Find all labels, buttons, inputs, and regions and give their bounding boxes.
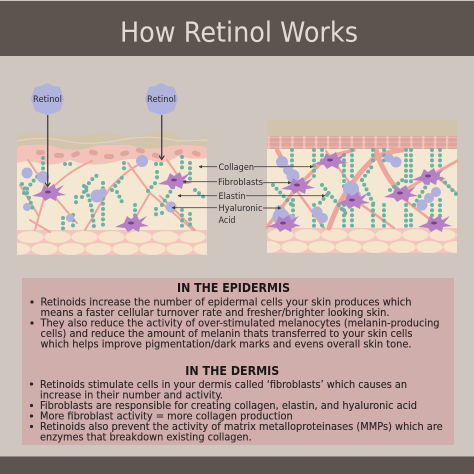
footer bar <box>0 456 474 474</box>
diagram: skin after retinol (right cross-section) <box>267 120 457 253</box>
label: hyaluronic acid <box>172 204 281 226</box>
fibroblast cells <box>32 172 192 232</box>
collagen fibres <box>20 160 195 232</box>
dermis bullet list: enzymes that breakdown existing collagen. <box>40 430 252 443</box>
epidermis bullet list: means a faster cellular turnover rate and fresher/brighter looking skin. <box>40 306 390 319</box>
label: collagen <box>199 163 313 173</box>
epidermis pink layer <box>17 145 207 165</box>
dermis bullet list: More fibroblast activity = more collagen production <box>40 410 293 423</box>
epidermis bullet list: Retinoids increase the number of epidermal cells your skin produces which <box>40 296 412 309</box>
epidermis bullet list: which helps improve pigmentation/dark marks and evens overall skin tone. <box>40 337 412 350</box>
elastin chains <box>22 157 205 229</box>
label: hyaluronic acid: Acid <box>218 216 236 226</box>
dermis bullet list <box>30 378 443 443</box>
label: collagen: Collagen <box>218 163 254 173</box>
label: elastin: Elastin <box>218 192 246 202</box>
retinol molecule 2 <box>145 83 178 115</box>
epidermis bullet list: cells) and reduce the amount of melanin thats transferred to your skin cells <box>40 327 413 340</box>
labels and leader arrows between diagrams <box>172 163 325 226</box>
dermis bullet list: Fibroblasts are responsible for creating collagen, elastin, and hyaluronic acid <box>40 399 417 412</box>
epidermis cells <box>267 136 457 149</box>
hyaluronic acid bubbles <box>22 155 176 222</box>
label: fibroblasts: Fibroblasts <box>218 178 263 188</box>
retinol molecule 1 <box>31 83 64 115</box>
arrow: retinol into skin 2 <box>161 115 163 159</box>
fibroblast cells <box>267 152 452 232</box>
retinol molecule 1: Retinol <box>33 95 62 105</box>
elastin chains <box>273 150 457 228</box>
stratum corneum tan layer <box>17 131 207 150</box>
stratum corneum <box>267 120 457 136</box>
dermis background <box>267 149 457 229</box>
arrow: retinol into skin 1 <box>47 115 49 186</box>
label: hyaluronic acid: Hyaluronic <box>218 204 263 214</box>
pigment cells <box>36 147 201 159</box>
fat layer <box>267 228 457 253</box>
diagram: skin before retinol penetration (left cross-section) <box>17 131 207 255</box>
label: fibroblasts <box>183 178 291 188</box>
retinol molecule 2: Retinol <box>147 95 176 105</box>
text panel <box>22 278 454 445</box>
heading: in the epidermis: IN THE EPIDERMIS <box>177 280 290 295</box>
epidermis bullet list <box>30 296 440 350</box>
heading: in the dermis: IN THE DERMIS <box>185 363 279 378</box>
collagen fibres <box>267 150 457 228</box>
dermis background <box>17 150 207 231</box>
title bar <box>0 1 474 56</box>
title: How Retinol Works <box>120 16 358 48</box>
dermis bullet list: increase in their number and activity. <box>40 389 223 402</box>
hyaluronic acid bubbles <box>272 154 441 226</box>
dermis bullet list: Retinoids stimulate cells in your dermis called ‘fibroblasts’ which causes an <box>40 378 407 391</box>
fat layer <box>17 230 207 255</box>
